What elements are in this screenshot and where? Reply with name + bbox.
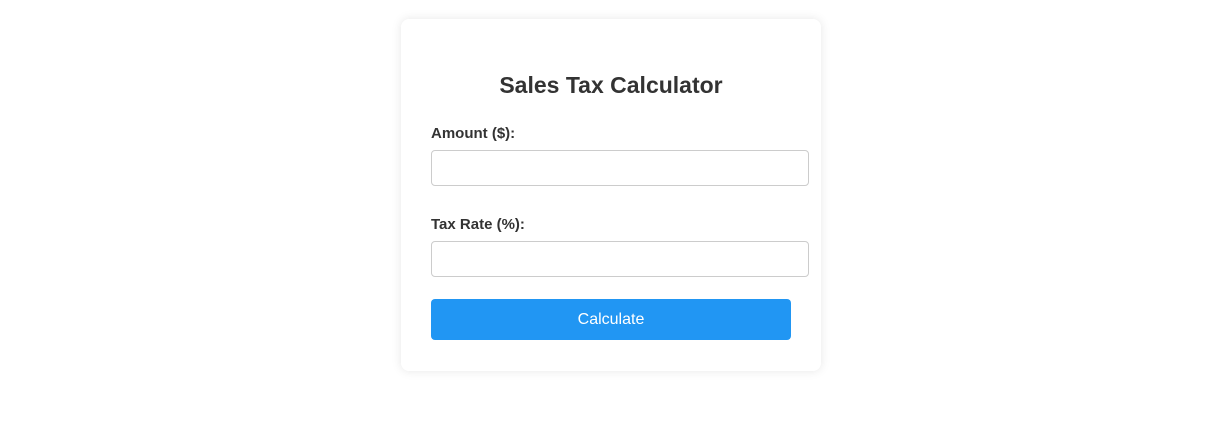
- title: Sales Tax Calculator: [499, 72, 723, 98]
- button: calculate: [431, 299, 791, 340]
- input: amount: [431, 150, 809, 186]
- button: calculate: Calculate: [578, 311, 644, 328]
- label: amount: Amount ($):: [431, 125, 515, 142]
- panel: calculator card: [401, 19, 821, 371]
- input: tax rate: [431, 241, 809, 277]
- label: tax rate: Tax Rate (%):: [431, 216, 525, 233]
